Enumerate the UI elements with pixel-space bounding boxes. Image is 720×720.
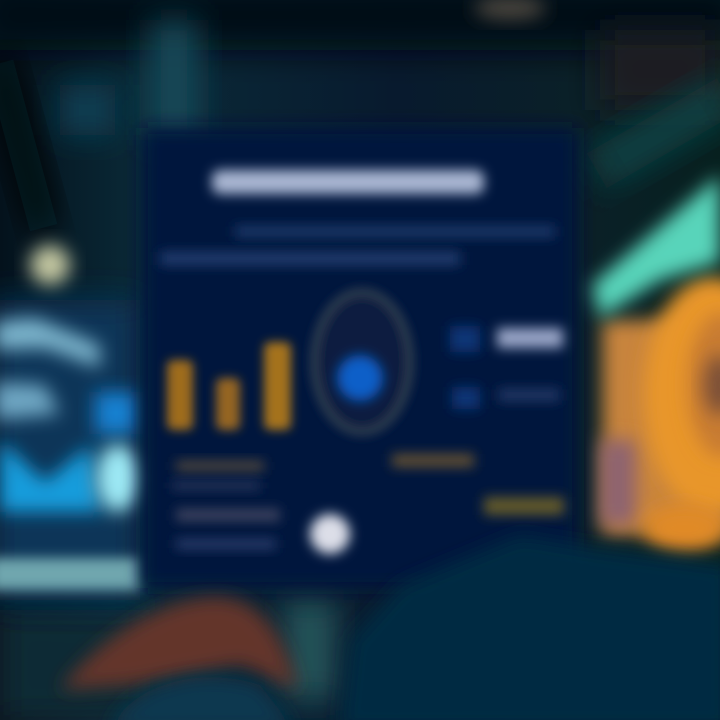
panel: central infographic xyxy=(142,128,578,588)
panel: right face illustration xyxy=(592,175,720,552)
chart: ring gauge xyxy=(314,292,410,432)
teal band xyxy=(592,175,720,318)
bar chart xyxy=(167,342,291,430)
person: hand xyxy=(60,597,298,720)
text block: left upper xyxy=(172,461,264,490)
person: shoulder xyxy=(340,535,720,720)
stat: lower right xyxy=(452,387,560,409)
text block: yellow label xyxy=(484,497,564,515)
text block: left lower xyxy=(176,509,280,549)
stat: top right xyxy=(450,326,563,352)
text block: orange label xyxy=(392,454,474,467)
panel: left blurred screen xyxy=(0,245,140,600)
title xyxy=(212,170,484,194)
text block: subtitle lines xyxy=(160,226,555,265)
icon: white circle xyxy=(310,514,350,554)
icon: pale round light xyxy=(30,245,70,285)
